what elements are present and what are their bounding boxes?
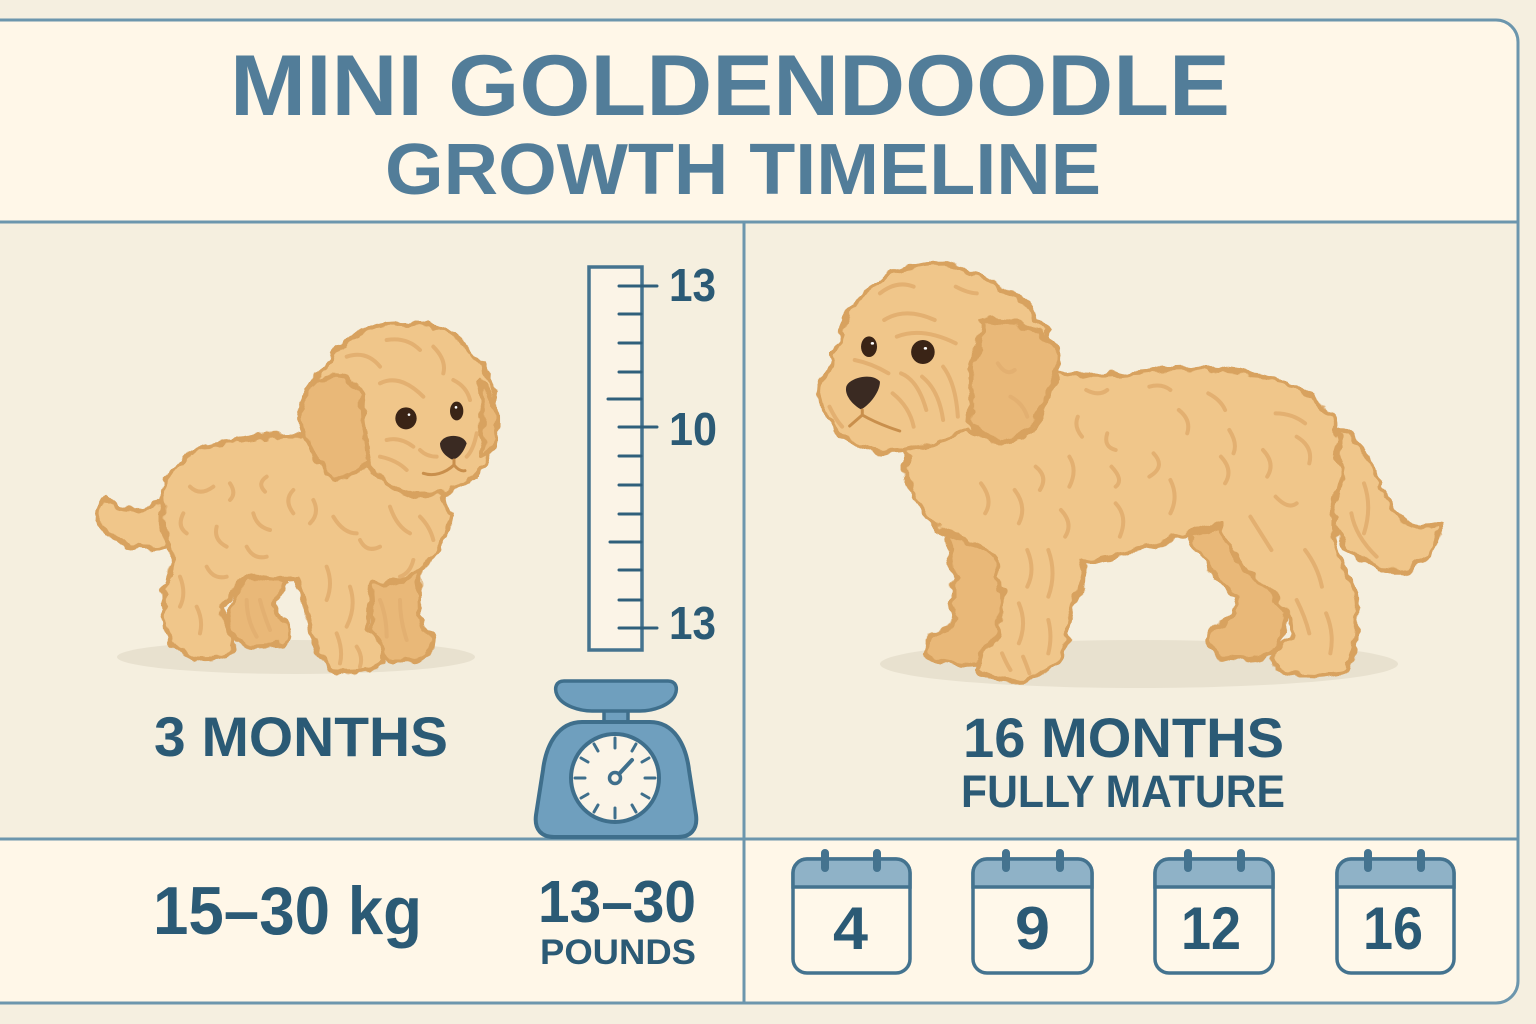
icon: calendar month 9 <box>973 853 1092 973</box>
panel: 3 months puppy <box>98 323 497 674</box>
dog mouth <box>850 410 900 431</box>
panel: 16 months adult dog <box>819 263 1439 688</box>
illustration: puppy <box>98 323 497 672</box>
icon: calendar month 16 <box>1337 853 1454 973</box>
shadow under adult dog <box>880 640 1398 688</box>
icon: calendar month 4: 4 <box>833 895 869 962</box>
label: fully mature: FULLY MATURE <box>961 766 1285 817</box>
ruler chart <box>589 259 717 650</box>
pounds value: 13–30 <box>538 869 696 935</box>
stat: weight in pounds <box>538 869 696 972</box>
title <box>230 38 1230 210</box>
ruler label bottom: 13 <box>669 597 716 649</box>
puppy mouth <box>423 460 465 475</box>
label: 16 months: 16 MONTHS <box>963 706 1284 769</box>
ruler label middle: 10 <box>669 403 717 455</box>
icon: kitchen scale <box>536 681 696 837</box>
puppy nose <box>440 436 467 459</box>
stat: weight in kg: 15–30 kg <box>153 873 422 949</box>
puppy eyes <box>395 402 463 429</box>
label: 3 months: 3 MONTHS <box>154 705 448 768</box>
heading: main title: MINI GOLDENDOODLE <box>230 38 1230 134</box>
icon: calendar month 4 <box>793 853 910 973</box>
ruler label top: 13 <box>669 259 716 311</box>
illustration: adult dog <box>819 263 1439 680</box>
icon: calendar month 9: 9 <box>1015 895 1050 962</box>
dog nose <box>846 377 880 409</box>
icon: calendar month 12: 12 <box>1181 895 1241 962</box>
heading: subtitle: GROWTH TIMELINE <box>385 130 1101 210</box>
dog eyes <box>861 336 935 364</box>
pounds unit: POUNDS <box>540 933 696 972</box>
shadow under puppy <box>117 640 475 674</box>
icon: calendar month 16: 16 <box>1363 895 1423 962</box>
icon: calendar month 12 <box>1155 853 1273 973</box>
